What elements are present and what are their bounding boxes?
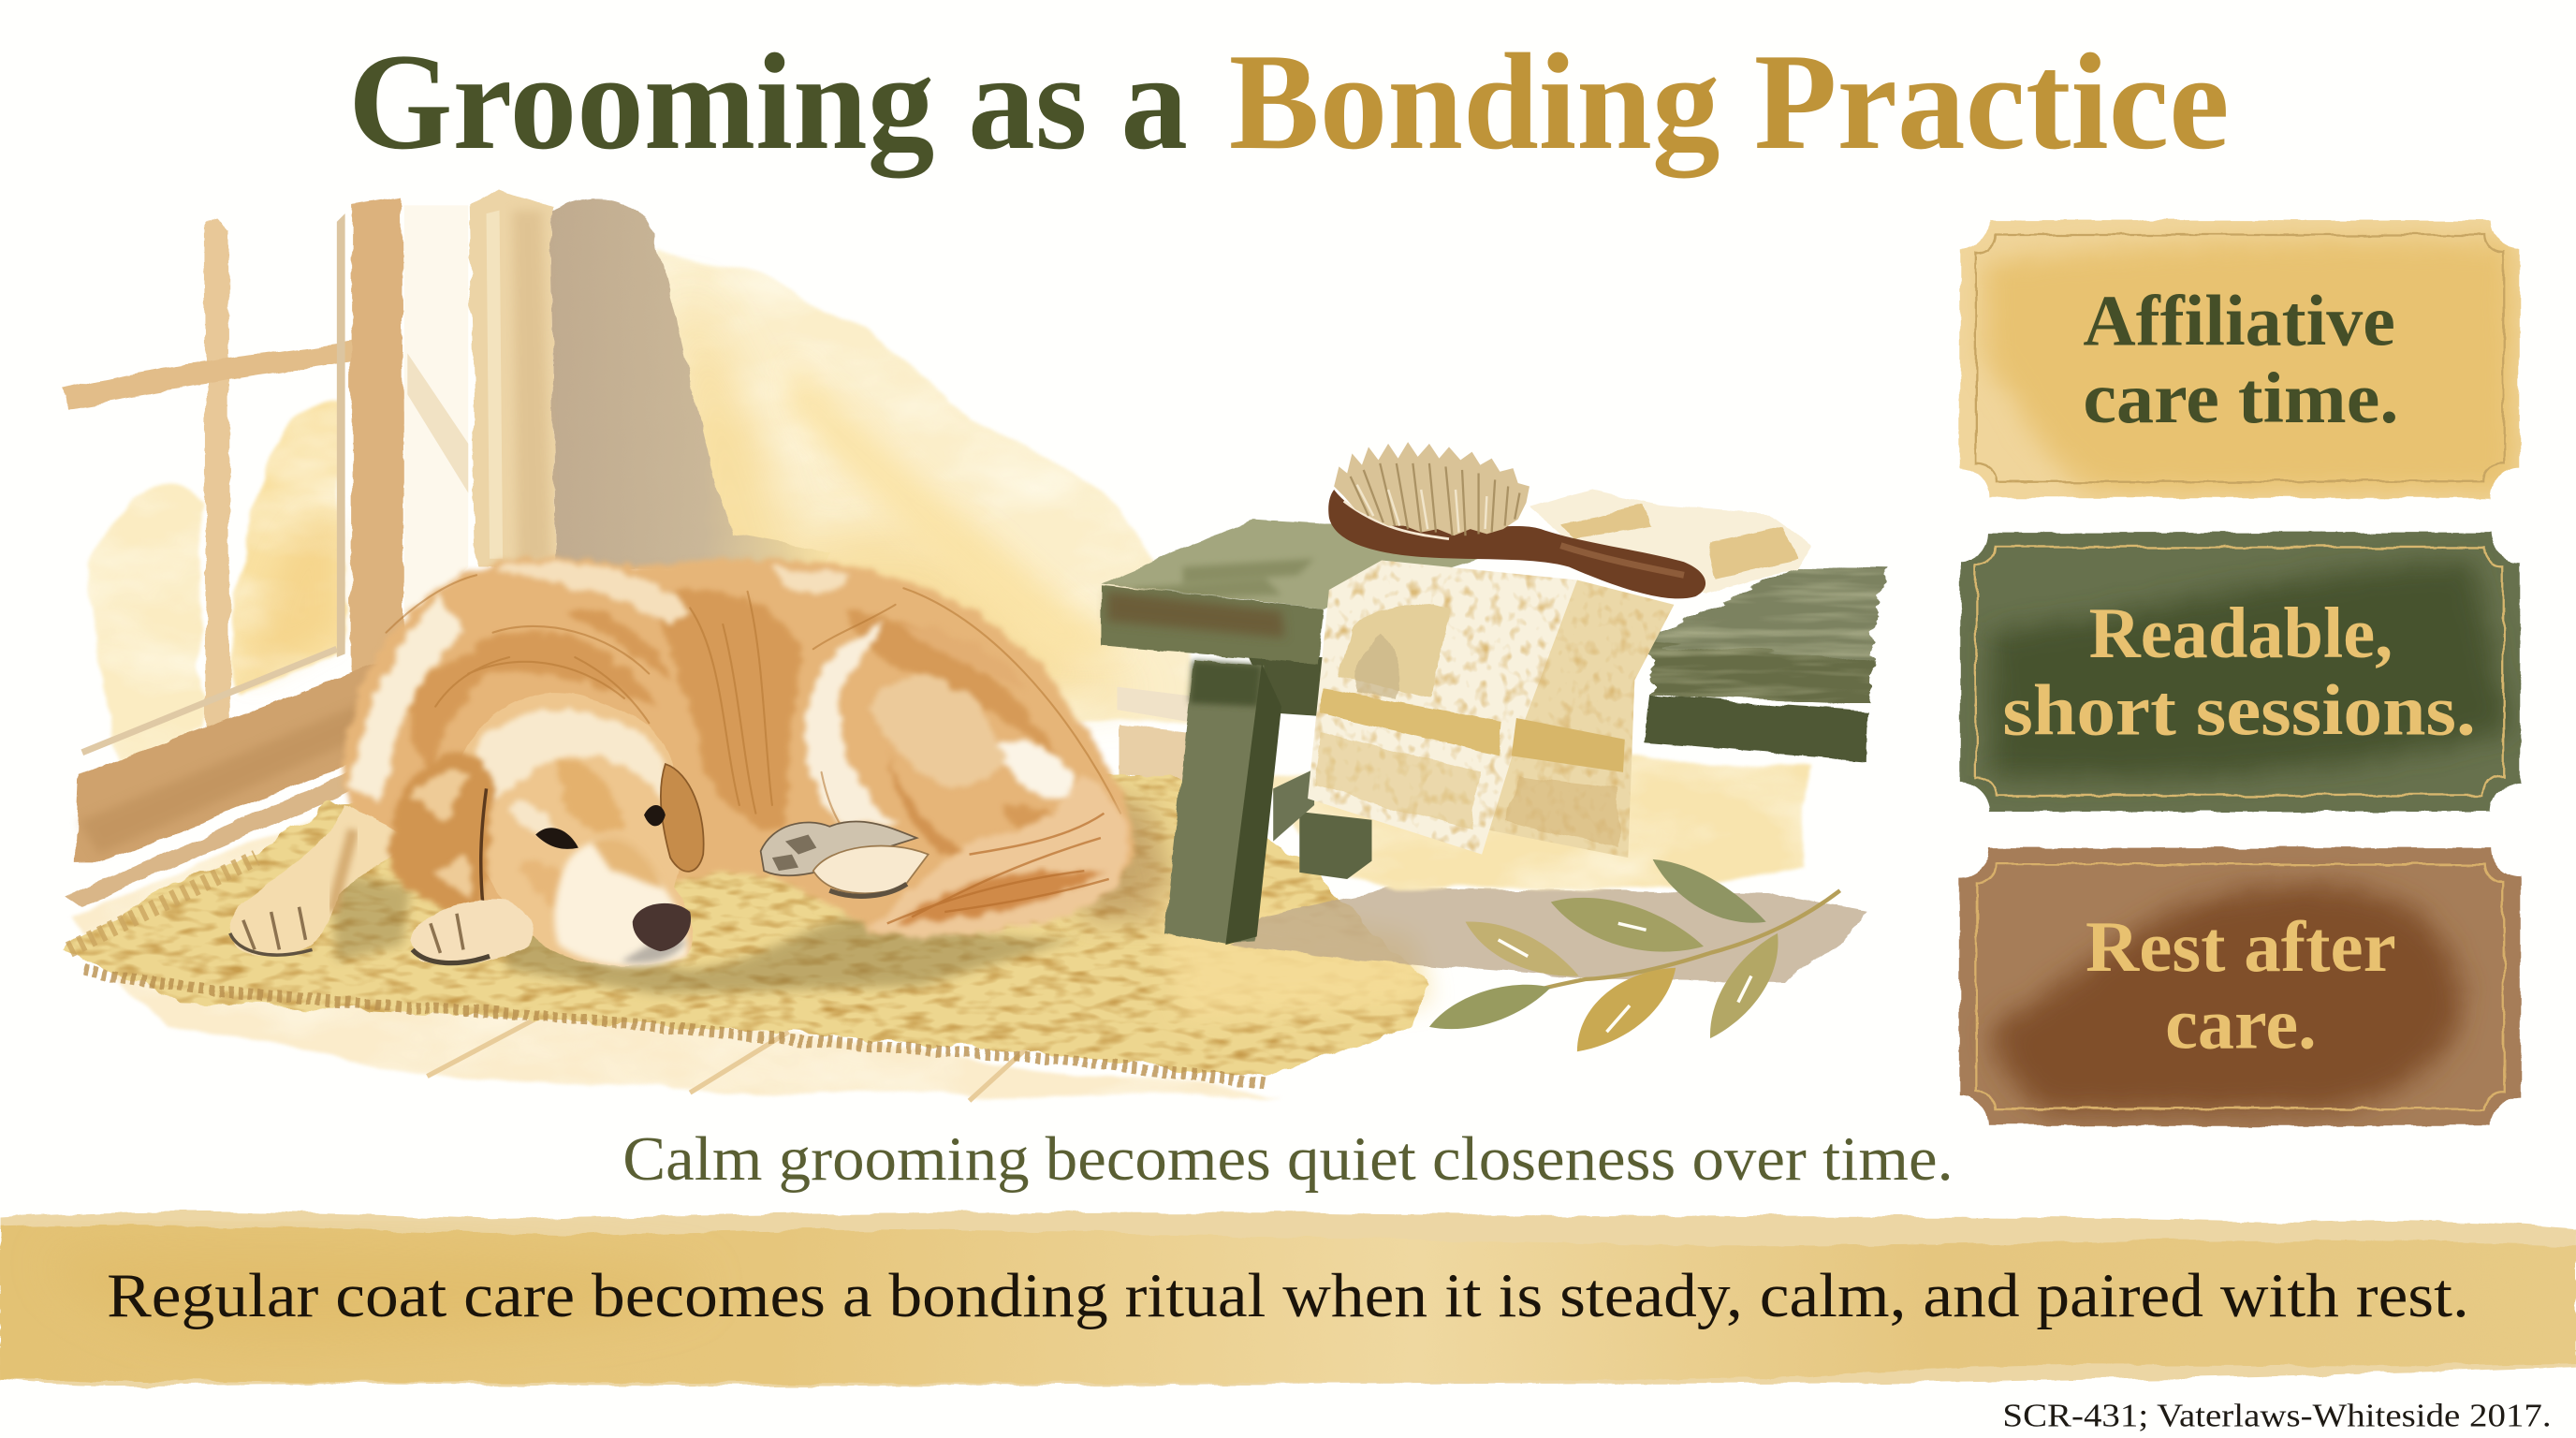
hind paws: [761, 822, 929, 896]
bench far side: [1653, 566, 1886, 695]
fur strokes: [386, 575, 1120, 855]
towel bands: [1319, 688, 1501, 756]
banner text: Regular coat care becomes a bonding ritual when it is steady, calm, and paired with rest.: [107, 1262, 2469, 1330]
eyes: [535, 805, 666, 849]
bench top streaks: [1134, 559, 1314, 600]
panel 1 label: [2083, 281, 2398, 438]
towel left panel: [1308, 560, 1577, 855]
bench front: [1101, 585, 1325, 664]
panel: rest after care: [1960, 848, 2520, 1125]
leaf 4: [1429, 985, 1551, 1029]
forehead markings: [476, 710, 671, 909]
panel 2 label: Readable,: [2089, 593, 2393, 673]
front leg and paw: [229, 805, 411, 955]
bench: [1101, 520, 1886, 945]
panel 2 label: [2002, 593, 2476, 750]
leaf 5: [1577, 968, 1676, 1051]
banner wash: [0, 1212, 2576, 1386]
leaf 2: [1551, 898, 1704, 952]
bench shadow on floor: [1229, 888, 1868, 983]
golden retriever: [229, 557, 1134, 966]
panel 2 label: short sessions.: [2002, 669, 2476, 750]
window: [63, 189, 555, 907]
leaf 3: [1466, 921, 1579, 976]
panel: affiliative care time: [1960, 220, 2520, 498]
woven rug: [63, 772, 1429, 1084]
leaf 1: [1653, 859, 1766, 923]
title: Grooming as a: [348, 25, 1188, 179]
brush bristles: [1334, 442, 1530, 536]
tail: [866, 772, 1129, 935]
towel right panel: [1486, 580, 1674, 858]
panel 3 label: care.: [2165, 984, 2317, 1064]
panel 1 label: care time.: [2083, 358, 2398, 438]
grooming brush: [1328, 442, 1705, 598]
bench underside block: [1249, 657, 1325, 716]
bench brace: [1273, 769, 1314, 842]
dark coat shading: [410, 591, 1084, 856]
panel 3 label: Rest after: [2086, 906, 2396, 987]
panel: readable short sessions: [1960, 533, 2520, 812]
bench top: [1101, 520, 1479, 608]
leaf 6: [1710, 933, 1778, 1038]
towel: [1308, 490, 1812, 858]
brush wood highlight: [1560, 546, 1684, 575]
panel 1 base: [1960, 220, 2520, 498]
head: [453, 693, 692, 966]
left ear: [388, 752, 496, 910]
wall wash: [550, 198, 1195, 723]
light coat patches: [348, 562, 1081, 825]
title: Bonding Practice: [1229, 25, 2230, 179]
towel wash patches: [1339, 604, 1449, 698]
takeaway banner: [0, 1212, 2576, 1386]
panel 3 label: [2086, 906, 2396, 1064]
illustration: sleeping dog with brush and bench: [63, 189, 1886, 1101]
floor yellow patch: [1265, 756, 1808, 888]
front paw under chin: [411, 900, 534, 964]
towel top fold: [1530, 490, 1812, 594]
leaf sprig: [1429, 859, 1840, 1051]
citation: SCR-431; Vaterlaws-Whiteside 2017.: [2002, 1397, 2552, 1433]
floor and baseboard: [66, 687, 1281, 1101]
muzzle: [554, 837, 687, 966]
leaf highlights: [1499, 923, 1751, 1032]
bench front leg: [1164, 661, 1262, 945]
bench back leg: [1299, 812, 1372, 879]
caption: Calm grooming becomes quiet closeness over time.: [622, 1125, 1954, 1194]
dog body: [342, 557, 1134, 932]
right ear: [661, 764, 704, 872]
banner darker stain: [50, 1248, 700, 1341]
panel 3 base: [1960, 848, 2520, 1125]
panel 1 label: Affiliative: [2083, 281, 2395, 361]
brush wood: [1328, 490, 1705, 598]
panel 2 base: [1960, 533, 2520, 812]
title: [348, 25, 2230, 179]
nose: [633, 903, 691, 951]
